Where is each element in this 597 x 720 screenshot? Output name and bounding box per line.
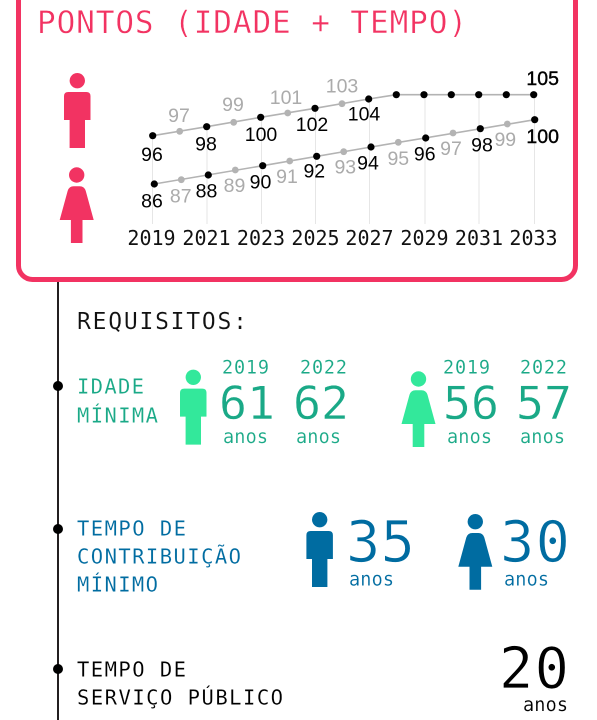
line chart: 92 [303, 161, 325, 183]
line chart: 91 [276, 166, 298, 188]
stat: 20 anos: anos [523, 695, 568, 716]
title: PONTOS (IDADE + TEMPO) [37, 5, 467, 41]
line chart: 97 [168, 105, 190, 127]
label: tempo de servico publico [77, 658, 283, 710]
timeline [53, 280, 63, 720]
label: idade minima: IDADE [77, 375, 144, 399]
line chart: 98 [195, 134, 217, 156]
line chart: 88 [196, 180, 217, 202]
line chart: 97 [440, 138, 462, 160]
line chart: 104 [348, 104, 380, 126]
stat: man 35: 35 [346, 510, 415, 576]
stat: man 2019: anos [223, 427, 268, 448]
line chart: 93 [334, 156, 356, 178]
label: tempo de contribuicao minimo [77, 517, 241, 597]
line chart: 2029 [400, 226, 449, 250]
line chart: 99 [222, 94, 244, 116]
stat: woman 2019 [443, 357, 499, 448]
line chart: 2021 [182, 226, 231, 250]
section: tempo de contribuicao [77, 510, 570, 597]
line chart: 94 [357, 152, 379, 174]
stat: woman 30: anos [504, 570, 549, 590]
line chart: 95 [387, 148, 409, 170]
stat: woman 2022: 2022 [520, 357, 567, 378]
line chart: 101 [270, 87, 302, 109]
icon: woman blue [458, 514, 492, 590]
line chart: 2023 [237, 226, 285, 250]
label: tempo de servico publico: TEMPO DE [77, 658, 186, 682]
stat: woman 2022 [516, 357, 572, 448]
heading: requisitos: REQUISITOS: [77, 309, 247, 335]
stat: woman 2019: 56 [443, 377, 499, 430]
line chart: 105 [526, 68, 559, 90]
stat: 20 anos: 20 [499, 636, 569, 702]
icon: man blue [306, 512, 333, 587]
icon: woman green [402, 371, 436, 447]
line chart: 87 [170, 186, 192, 208]
stat: man 2022: 62 [293, 377, 349, 430]
line chart: 98 [471, 134, 493, 156]
stat: man 2019 [219, 357, 275, 448]
stat: woman 2019: 2019 [443, 357, 490, 378]
panel: pontos [18, 0, 576, 280]
stat: man 2022 [293, 357, 349, 448]
line chart: 90 [250, 172, 271, 194]
line chart: 102 [296, 114, 328, 136]
label: tempo de servico publico: SERVIÇO PÚBLICO [77, 685, 283, 710]
stat: woman 2022: 57 [516, 377, 572, 430]
line chart: 2027 [345, 226, 394, 250]
label: tempo de contribuicao minimo: TEMPO DE [77, 517, 186, 541]
line chart: 100 [526, 126, 559, 148]
line chart [127, 68, 559, 250]
stat: woman 2019: anos [447, 427, 492, 448]
line chart: 2025 [291, 226, 340, 250]
line chart: 2031 [455, 226, 503, 250]
label: idade minima: MÍNIMA [77, 402, 158, 427]
section: idade minima [77, 357, 572, 448]
stat: man 35: anos [349, 570, 394, 590]
stat: woman 2022: anos [520, 427, 565, 448]
stat: man 2022: anos [296, 427, 341, 448]
line chart: 86 [141, 190, 163, 212]
line chart: 100 [245, 124, 277, 146]
label: tempo de contribuicao minimo: MÍNIMO [77, 572, 158, 597]
line chart: 103 [326, 76, 358, 98]
stat: man 2022: 2022 [300, 357, 347, 378]
stat: man 2019: 61 [219, 377, 275, 430]
icon: woman [60, 167, 94, 243]
stat: man 2019: 2019 [222, 357, 269, 378]
line chart: 96 [141, 144, 163, 166]
icon: man green [180, 370, 206, 445]
line chart: 96 [414, 144, 436, 166]
line chart: 2019 [127, 226, 176, 250]
line chart: 89 [224, 175, 245, 197]
stat: woman 30: 30 [500, 510, 570, 576]
label: tempo de contribuicao minimo: CONTRIBUIÇÃO [77, 543, 241, 569]
line chart: 2033 [509, 226, 558, 250]
section: tempo de servico publico [77, 636, 569, 716]
icon: man [64, 73, 90, 148]
line chart: 99 [494, 129, 516, 151]
label: idade minima [77, 375, 158, 427]
